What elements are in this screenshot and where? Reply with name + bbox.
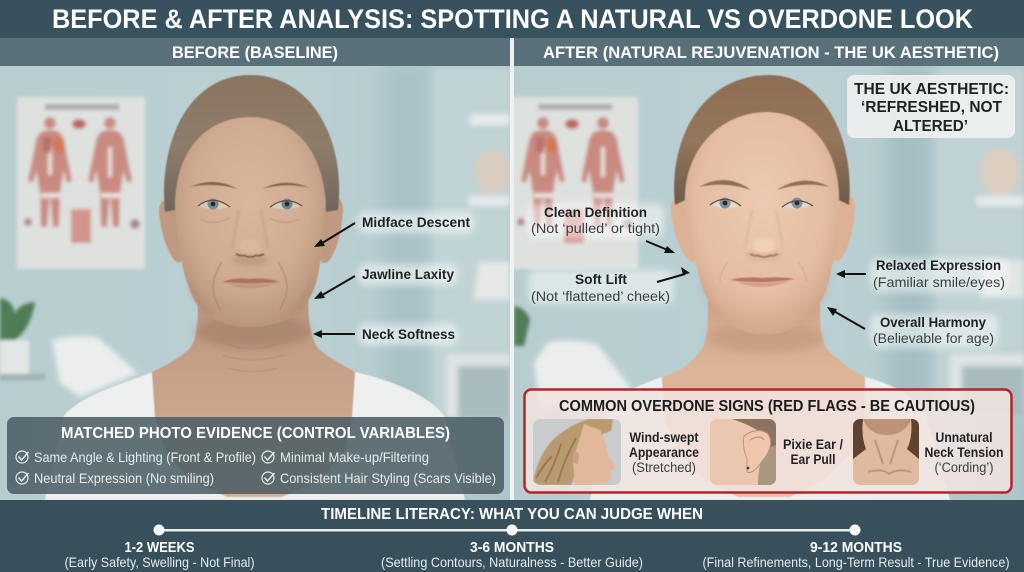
wind-swept label: Wind-swept — [630, 430, 699, 445]
panel: before (baseline) — [0, 66, 512, 500]
brows, eyes, nose, mouth — [699, 180, 830, 287]
ears — [159, 200, 185, 262]
under-chin shadow — [707, 323, 823, 353]
thumbnail: wind-swept profile — [533, 419, 621, 490]
lower-face shadows — [187, 255, 315, 302]
ears — [671, 198, 697, 262]
face — [685, 108, 839, 334]
after callout: Overall Harmony — [827, 307, 998, 348]
hair — [164, 75, 339, 212]
wind-swept label: Appearance — [629, 445, 699, 460]
after portrait — [590, 75, 950, 500]
blurred plant — [514, 306, 530, 346]
callout: the UK aesthetic: THE UK AESTHETIC: — [854, 81, 1009, 98]
wind-swept label: (Stretched) — [632, 460, 696, 475]
blurred anatomy poster — [17, 97, 145, 269]
face — [175, 112, 325, 327]
blurred shelves and bust — [950, 148, 1024, 416]
before callout: Jawline Laxity: Jawline Laxity — [362, 266, 454, 282]
milestone: 1-2 weeks: 1-2 WEEKS — [124, 540, 195, 556]
callout: the UK aesthetic: ALTERED’ — [893, 118, 968, 135]
neck and chest — [662, 300, 865, 497]
before clinic background — [0, 66, 512, 500]
header: after: AFTER (NATURAL REJUVENATION - THE UK AESTHETIC) — [543, 44, 999, 62]
after callout: Soft Lift: Soft Lift — [575, 271, 627, 287]
header: after — [514, 38, 1024, 66]
blurred treatment bed — [532, 338, 632, 388]
pixie ear label: Ear Pull — [790, 452, 836, 467]
evidence item: same angle: Same Angle & Lighting (Front & Profile) — [34, 449, 256, 465]
panel: after (natural rejuvenation) — [510, 66, 1024, 500]
overdone heading: COMMON OVERDONE SIGNS (RED FLAGS - BE CAUTIOUS) — [559, 398, 975, 415]
neck tension label — [924, 430, 1004, 475]
after callout: Relaxed Expression: Relaxed Expression — [876, 257, 1001, 273]
thumbnail: neck cording — [853, 419, 919, 485]
before callout: Midface Descent — [314, 212, 474, 247]
timeline heading: TIMELINE LITERACY: WHAT YOU CAN JUDGE WHEN — [321, 506, 703, 523]
blurred anatomy poster — [510, 97, 638, 269]
panel: timeline literacy — [0, 500, 1024, 572]
thumbnail: pixie ear — [710, 419, 776, 485]
milestone: 3-6 months: (Settling Contours, Naturalness - Better Guide) — [381, 554, 643, 570]
milestone: 3-6 months — [381, 540, 643, 570]
after clinic background — [510, 66, 1024, 500]
hair — [674, 75, 850, 205]
after callout: Overall Harmony: (Believable for age) — [873, 330, 994, 346]
shirt — [590, 377, 950, 500]
pixie ear label: Pixie Ear / — [783, 437, 843, 452]
neck tension label: (‘Cording’) — [934, 460, 994, 475]
header: before: BEFORE (BASELINE) — [172, 44, 338, 62]
neck and chest — [152, 290, 355, 497]
after callout: Relaxed Expression — [836, 257, 1008, 292]
after callout: Soft Lift: (Not ‘flattened’ cheek) — [531, 288, 670, 304]
title bar: BEFORE & AFTER ANALYSIS: SPOTTING A NATURAL VS OVERDONE LOOK — [52, 4, 973, 34]
before portrait — [45, 75, 465, 500]
after callout: Clean Definition — [528, 204, 675, 253]
callout: the UK aesthetic — [847, 75, 1015, 138]
blurred treatment bed — [52, 336, 138, 397]
before callout: Neck Softness: Neck Softness — [362, 326, 455, 342]
panel: matched photo evidence — [7, 417, 504, 494]
neck tension label: Unnatural — [936, 430, 992, 445]
milestone: 1-2 weeks — [64, 540, 254, 570]
before callout: Neck Softness — [313, 324, 458, 345]
panel: common overdone signs — [524, 390, 1012, 492]
lower-face shadows — [700, 252, 830, 306]
pixie ear label — [783, 437, 843, 467]
before callout: Midface Descent: Midface Descent — [362, 214, 470, 230]
evidence item: consistent hair: Consistent Hair Styling (Scars Visible) — [280, 470, 496, 486]
under-chin shadow — [195, 315, 311, 349]
milestone: 9-12 months — [702, 540, 1010, 570]
brows, eyes, nose, mouth, wrinkles — [190, 182, 310, 310]
wind-swept label — [629, 430, 699, 475]
timeline axis — [154, 524, 860, 536]
after callout: Overall Harmony: Overall Harmony — [880, 314, 986, 330]
panel divider — [510, 38, 514, 500]
shirt — [45, 372, 465, 500]
milestone: 3-6 months: 3-6 MONTHS — [470, 540, 554, 556]
neck tension label: Neck Tension — [924, 445, 1004, 460]
after callout: Clean Definition: (Not ‘pulled’ or tight) — [531, 220, 660, 236]
after callout: Clean Definition: Clean Definition — [544, 204, 647, 220]
callout: the UK aesthetic: ‘REFRESHED, NOT — [861, 99, 1002, 116]
evidence item: minimal make-up: Minimal Make-up/Filtering — [280, 449, 429, 465]
header: before — [0, 38, 510, 66]
blurred shelves and bust — [446, 114, 511, 418]
blurred plant — [0, 298, 45, 380]
after callout: Relaxed Expression: (Familiar smile/eyes) — [873, 274, 1005, 290]
evidence item: neutral expression: Neutral Expression (No smiling) — [34, 470, 214, 486]
before callout: Jawline Laxity — [314, 264, 458, 299]
milestone: 9-12 months: 9-12 MONTHS — [810, 540, 902, 556]
milestone: 1-2 weeks: (Early Safety, Swelling - Not Final) — [64, 554, 254, 570]
after callout: Soft Lift — [528, 267, 690, 304]
evidence heading: MATCHED PHOTO EVIDENCE (CONTROL VARIABLES) — [61, 425, 450, 442]
